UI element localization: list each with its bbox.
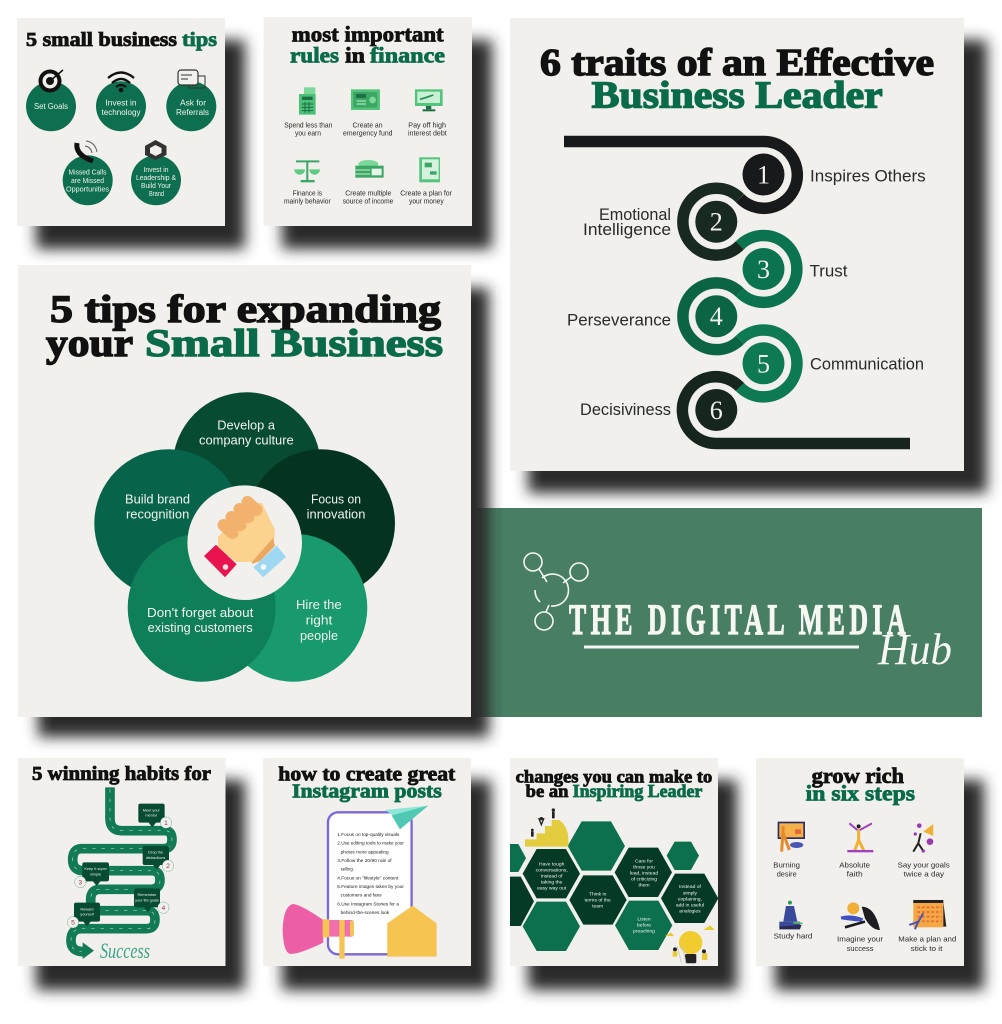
instagram tips list: selling. <box>341 867 354 872</box>
tip: invest in leadership: Leadership & <box>136 175 176 182</box>
instagram tips list: behind-the-scenes look <box>341 910 390 915</box>
callout 2: Drop the <box>148 851 163 855</box>
step 5: Communication <box>810 355 924 373</box>
hex text: conversations, <box>536 867 568 873</box>
instagram tips list: 6.Use Instagram Stories for a <box>337 901 399 906</box>
icon: safe <box>351 89 380 110</box>
label: success <box>847 944 874 953</box>
venn label: brand recognition: Build brand <box>125 493 190 507</box>
venn label: right people: people <box>300 629 338 643</box>
panel: 5 winning habits for success <box>18 758 226 966</box>
illustration: light bulb team <box>665 925 715 963</box>
panel: grow rich in six steps <box>756 758 964 966</box>
callout 3 <box>75 862 109 888</box>
heading second line: in <box>345 42 365 67</box>
heading: 5 small business <box>26 29 177 51</box>
step 2: Intelligence <box>583 221 671 239</box>
step 3: Trust <box>810 263 848 281</box>
heading second line: be an <box>526 781 569 801</box>
chart: winding trait path <box>564 141 910 444</box>
venn label: existing customers: existing customers <box>148 621 253 635</box>
callout 5: yourself <box>80 913 95 917</box>
hex text: them <box>638 883 650 889</box>
hex text: terms of the <box>584 898 611 904</box>
label: stick to it <box>911 944 943 953</box>
tip: missed calls: Missed Calls <box>68 168 107 176</box>
label: Say your goals <box>898 860 950 869</box>
label <box>400 190 453 205</box>
instagram tips list: 1.Focus on top-quality visuals <box>337 832 400 837</box>
label: emergency fund <box>343 131 393 138</box>
label <box>898 860 950 879</box>
tip: invest in leadership: Build Your <box>141 183 172 190</box>
step 1: Inspires Others <box>810 168 926 186</box>
tip: invest in leadership <box>131 140 181 205</box>
callout 2: distractions <box>146 856 165 860</box>
heading second line: Instagram posts <box>292 781 442 803</box>
step 5: 5 <box>757 350 770 378</box>
callout 2 <box>143 846 174 871</box>
callout 4: your life goals <box>135 898 159 902</box>
hex text: Think in <box>589 892 607 898</box>
venn label: innovation <box>307 493 365 522</box>
callout 4: 4 <box>161 905 165 912</box>
venn label: existing customers <box>147 606 254 635</box>
script: Success: Success <box>100 938 150 963</box>
step 4: Perseverance <box>567 312 671 330</box>
heading second line: Inspiring Leader <box>573 781 703 801</box>
venn label: brand recognition: recognition <box>126 508 189 522</box>
tip: set goals <box>26 70 76 131</box>
venn label: company culture: Develop a <box>217 419 275 433</box>
label: you earn <box>295 131 321 138</box>
step 6: Decisiviness <box>580 401 671 419</box>
callout 3: simple <box>90 872 101 876</box>
label <box>839 860 870 879</box>
hex text: simply <box>683 890 698 896</box>
illustration: climbing stairs <box>525 808 568 847</box>
heading: changes you can make to <box>516 766 713 786</box>
hex text: add in useful <box>676 902 704 908</box>
hex text: easy way out <box>537 885 567 891</box>
tip: invest in technology: Invest in <box>106 98 136 108</box>
callout 5: 5 <box>71 920 75 927</box>
callout 1: 1 <box>164 820 168 827</box>
icon: burning desire <box>778 822 805 852</box>
label: source of income <box>343 198 393 205</box>
phone with list <box>328 812 412 954</box>
tip: ask for referrals: Ask for <box>180 98 206 108</box>
tip: set goals: Set Goals <box>34 102 68 111</box>
instagram tips list: 5.Feature images taken by your <box>337 884 404 889</box>
label: Create an <box>352 122 383 129</box>
instagram tips list <box>337 832 404 915</box>
callout 3: 3 <box>78 879 82 886</box>
panel: 5 tips for expanding your small business <box>18 265 471 717</box>
icon: cash register <box>299 87 316 115</box>
callout 1: mentor <box>145 814 158 818</box>
hex text: before <box>637 922 651 928</box>
panel: how to create great instagram posts <box>263 758 471 966</box>
heading: 6 traits of an Effective <box>540 42 934 84</box>
step 6: 6 <box>710 396 723 425</box>
logo underline <box>584 646 859 648</box>
panel: most important rules in finance <box>264 17 472 226</box>
label: Create multiple <box>345 190 391 197</box>
venn label: right people <box>296 598 342 643</box>
label <box>898 935 956 953</box>
heading second line: Small Business <box>145 322 443 365</box>
step 2: Emotional <box>599 206 671 224</box>
tip: ask for referrals <box>166 70 216 131</box>
venn label: existing customers: Don't forget about <box>147 606 254 620</box>
logo wordmark: THE DIGITAL MEDIA <box>569 595 906 644</box>
hex text: Instead of <box>679 884 702 890</box>
label <box>343 122 393 138</box>
step 3 <box>742 248 848 290</box>
hex text <box>536 858 704 934</box>
label: Finance is <box>293 190 322 197</box>
label: Pay off high <box>408 122 446 129</box>
icon: monitor <box>415 89 443 111</box>
step 2 <box>583 201 737 243</box>
icon: handshake <box>204 494 286 577</box>
step 5 <box>742 342 924 384</box>
venn label: right people: right <box>306 613 333 627</box>
heading: most important <box>292 21 444 46</box>
icon: say your goals <box>913 823 933 853</box>
icon: envelope <box>387 906 437 957</box>
heading: tips <box>182 29 217 51</box>
callout 1: Meet your <box>143 809 161 813</box>
road path <box>71 787 172 959</box>
label: interest debt <box>408 131 447 138</box>
label: Burning <box>773 860 800 869</box>
label: Study hard <box>774 932 812 941</box>
icon: study hard <box>779 901 803 929</box>
hex text: analogies <box>679 908 701 914</box>
label <box>284 122 332 138</box>
label: mainly behavior <box>284 198 331 205</box>
step 3: 3 <box>757 255 770 284</box>
hex text: team <box>592 904 603 910</box>
heading: 5 tips for expanding <box>50 288 442 331</box>
hex text: taking the <box>541 879 563 885</box>
label: twice a day <box>904 870 944 879</box>
step 6 <box>580 389 737 431</box>
step 4 <box>567 295 737 337</box>
label <box>773 860 800 879</box>
heading: grow rich <box>812 763 904 788</box>
icon: megaphone <box>283 904 354 959</box>
callouts <box>67 804 174 928</box>
tip: missed calls <box>63 141 113 205</box>
heading second line: rules <box>290 42 339 67</box>
panel: changes you can make to be an inspiring leader <box>510 758 718 966</box>
hex text: Care for <box>635 858 653 864</box>
venn label: right people: Hire the <box>296 598 342 612</box>
instagram tips list: customers and fans <box>341 893 382 898</box>
heading second line: in six steps <box>806 781 915 806</box>
icon: imagine your success <box>841 902 880 930</box>
label: Create a plan for <box>400 190 453 197</box>
label: faith <box>847 870 863 879</box>
venn diagram <box>94 392 395 682</box>
callout 3: Keep it super <box>84 867 108 871</box>
instagram tips list: photos more appealing <box>341 849 389 854</box>
step 2: 2 <box>710 208 723 236</box>
venn label: innovation: innovation <box>307 508 365 522</box>
hex text: Listen <box>637 916 651 922</box>
callout 1 <box>138 804 172 828</box>
step 1 <box>742 154 926 196</box>
label <box>284 190 331 205</box>
icon: make a plan <box>909 900 946 929</box>
hex text: preaching <box>633 928 655 934</box>
label: Make a plan and <box>898 935 956 944</box>
callout 5: Reward <box>80 908 94 912</box>
icon: cash stack <box>355 160 384 178</box>
label <box>408 122 447 138</box>
icon: paper plane <box>385 806 428 829</box>
hex text: Have tough <box>539 861 565 867</box>
label: desire <box>777 870 797 879</box>
heading second line: finance <box>370 42 445 67</box>
hex text: lead, instead <box>630 871 658 877</box>
hex text: those you <box>633 865 655 871</box>
tip: ask for referrals: Referrals <box>176 108 209 117</box>
label: Spend less than <box>284 122 332 129</box>
heading second line: Business Leader <box>592 75 883 117</box>
tip: invest in leadership: Brand <box>149 191 164 198</box>
instagram tips list: 4.Focus on "lifestyle" content <box>337 875 399 880</box>
logo icon: connected nodes <box>524 553 588 630</box>
label <box>343 190 393 205</box>
icon: absolute faith <box>847 823 873 852</box>
label: Absolute <box>839 860 870 869</box>
label <box>837 935 884 953</box>
callout 4 <box>134 888 169 913</box>
callout 4: Remember <box>138 893 157 897</box>
hex text: instead of <box>541 873 563 879</box>
heading second line: your <box>46 322 133 365</box>
tip: invest in technology: technology <box>102 108 140 117</box>
venn label: company culture <box>199 419 294 448</box>
venn label: brand recognition <box>125 493 190 522</box>
hex text: explaining, <box>678 896 702 902</box>
tip: invest in technology <box>96 72 146 131</box>
tip: missed calls: Opportunities <box>66 184 109 194</box>
callout 5 <box>67 903 100 928</box>
hexagon grid <box>510 821 718 951</box>
tip: missed calls: are Missed <box>71 176 104 185</box>
heading: how to create great <box>278 763 456 785</box>
panel: 6 traits of an effective business leader <box>510 18 964 471</box>
venn label: company culture: company culture <box>199 434 294 448</box>
tip: invest in leadership: Invest in <box>144 167 169 174</box>
instagram tips list: 2.Use editing tools to make your <box>337 841 404 846</box>
heading: 5 winning habits for <box>32 764 211 785</box>
label: Imagine your <box>837 935 884 944</box>
step 4: 4 <box>710 302 723 331</box>
label: your money <box>409 198 444 205</box>
logo script: Hub: Hub <box>877 625 952 674</box>
callout 2: 2 <box>166 863 170 870</box>
instagram tips list: 3.Follow the 20/80 rule of <box>337 858 392 863</box>
icon: plan book <box>419 157 440 182</box>
icon: balance scale <box>294 161 320 182</box>
hex text: of criticizing <box>631 877 657 883</box>
step 1: 1 <box>757 160 770 190</box>
panel: 5 small business tips <box>17 18 225 226</box>
venn label: innovation: Focus on <box>311 493 361 507</box>
banner: The Digital Media Hub <box>471 508 982 717</box>
